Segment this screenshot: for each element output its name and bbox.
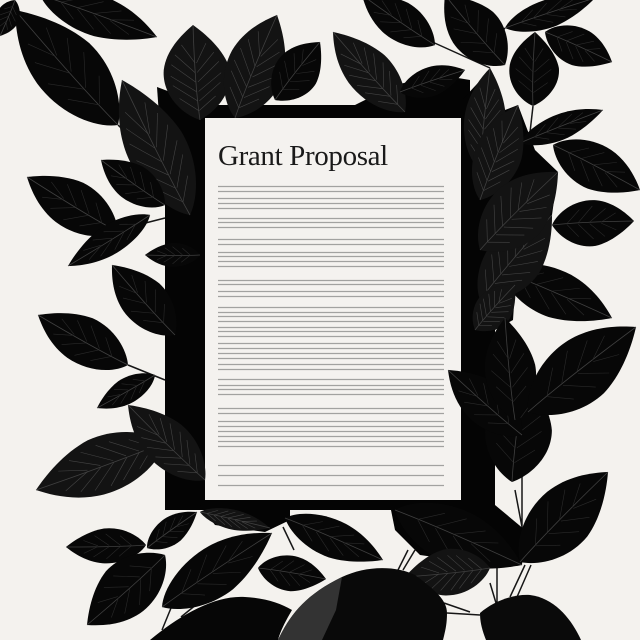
title: Grant Proposal [218,140,388,172]
ruled text lines [218,186,444,486]
foliage: right side leaves [459,66,622,343]
foliage: left side leaves [15,156,200,516]
stems [118,28,533,630]
foliage: top right leaves [316,0,640,248]
dark backing panel [157,70,558,565]
document page [205,118,461,500]
foliage: leaves overlapping page at right [433,302,640,486]
foliage: leaf overlapping page at left [112,388,221,496]
foliage: top left leaves [0,0,338,228]
foliage: bottom leaves [66,451,630,640]
